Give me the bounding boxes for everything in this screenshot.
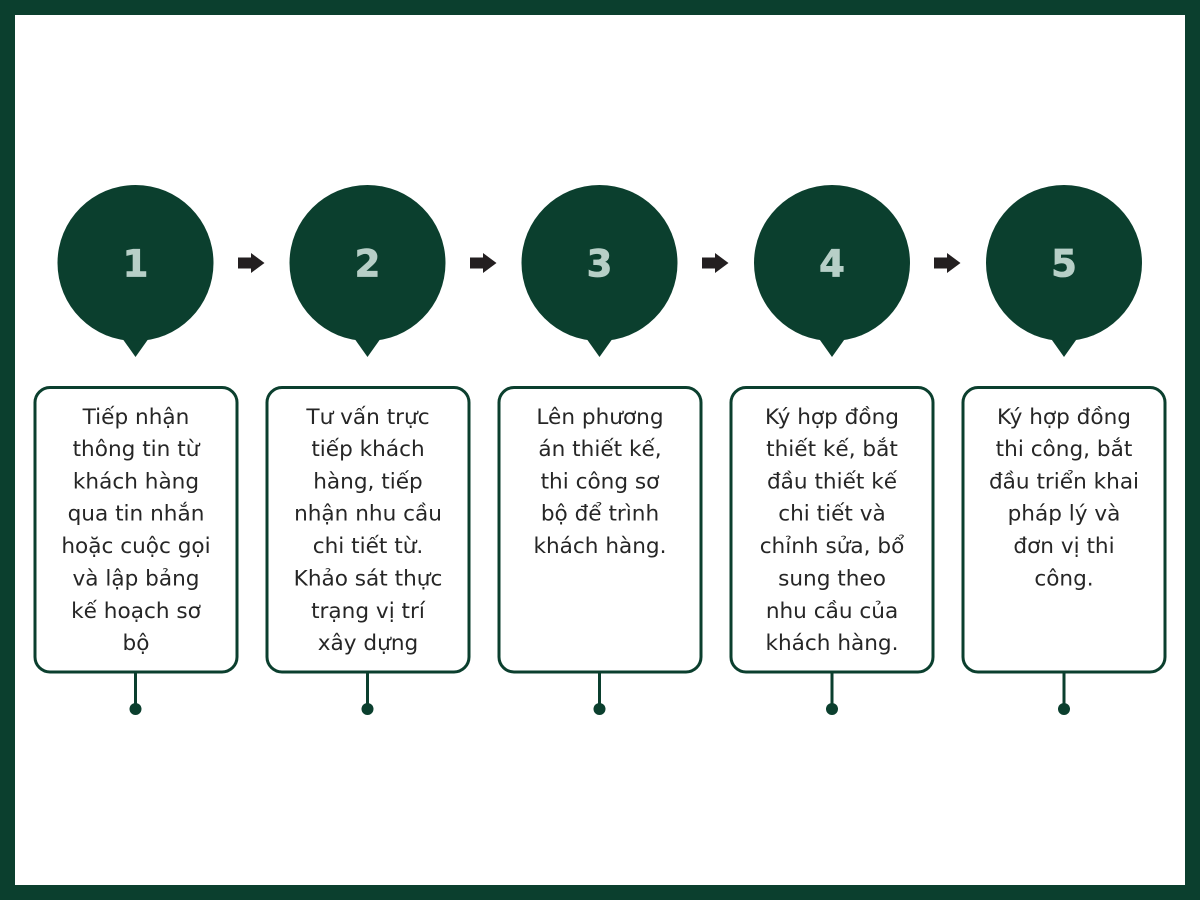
step 4 card: nhu cầu của <box>766 599 898 624</box>
step 2 card: trạng vị trí <box>311 599 426 624</box>
step 1 card: bộ <box>123 631 149 656</box>
step 2 card: nhận nhu cầu <box>294 502 442 526</box>
step 3 card: án thiết kế, <box>538 437 662 462</box>
step 1 card: kế hoạch sơ <box>71 599 202 624</box>
step 3 card: Lên phương <box>536 405 664 430</box>
step 1 card: qua tin nhắn <box>68 502 204 526</box>
step 1 card: Tiếp nhận <box>82 405 189 430</box>
step 3 card: bộ để trình <box>541 502 659 526</box>
step 4 card: chi tiết và <box>778 502 886 526</box>
step 1 connector <box>130 672 142 715</box>
step 5 card: pháp lý và <box>1008 502 1120 526</box>
arrow 3 to 4 <box>702 253 728 273</box>
step 3 badge: 3 <box>587 242 612 286</box>
step 4 card <box>731 388 933 672</box>
arrow 1 to 2 <box>238 253 264 273</box>
step 4 card: chỉnh sửa, bổ <box>760 534 904 559</box>
step 1 card: thông tin từ <box>73 437 201 462</box>
step 2 badge <box>290 185 446 357</box>
step 1 card <box>35 388 237 672</box>
step 5 card: thi công, bắt <box>996 437 1132 462</box>
step 3 card <box>499 388 701 672</box>
step 2 card: xây dựng <box>318 631 418 656</box>
step 4 badge <box>754 185 910 357</box>
step 5 card: Ký hợp đồng <box>997 405 1131 430</box>
step 5 card: công. <box>1034 566 1094 592</box>
step 4 connector <box>826 672 838 715</box>
step 2 card: chi tiết từ. <box>313 534 423 559</box>
step 4 card: sung theo <box>778 566 886 592</box>
step 4 card: thiết kế, bắt <box>766 437 898 462</box>
step 5 connector <box>1058 672 1070 715</box>
step 3 card: khách hàng. <box>533 534 667 559</box>
arrow 2 to 3 <box>470 253 496 273</box>
step 2 badge: 2 <box>355 242 380 286</box>
arrow 4 to 5 <box>934 253 960 273</box>
step 5 badge: 5 <box>1051 242 1077 286</box>
step 5 card <box>963 388 1165 672</box>
step 4 badge: 4 <box>819 242 845 286</box>
step 2 card: hàng, tiếp <box>313 470 423 494</box>
step 3 connector <box>594 672 606 715</box>
step 5 card: đơn vị thi <box>1013 534 1115 559</box>
step 3 badge <box>522 185 678 357</box>
step 3 card: thi công sơ <box>541 470 660 494</box>
step 1 card: khách hàng <box>73 470 199 494</box>
step 1 card: và lập bảng <box>72 566 200 592</box>
step 2 card: Tư vấn trực <box>305 405 430 430</box>
step 4 card: khách hàng. <box>765 631 899 656</box>
step 2 card: Khảo sát thực <box>294 566 442 592</box>
step 2 connector <box>362 672 374 715</box>
step 1 badge: 1 <box>123 242 148 286</box>
step 2 card: tiếp khách <box>311 437 425 462</box>
step 4 card: Ký hợp đồng <box>765 405 899 430</box>
step 1 card: hoặc cuộc gọi <box>61 534 211 559</box>
step 1 badge <box>58 185 214 357</box>
step 5 badge <box>986 185 1142 357</box>
step 2 card <box>267 388 469 672</box>
step 4 card: đầu thiết kế <box>767 470 898 494</box>
step 5 card: đầu triển khai <box>989 470 1139 494</box>
